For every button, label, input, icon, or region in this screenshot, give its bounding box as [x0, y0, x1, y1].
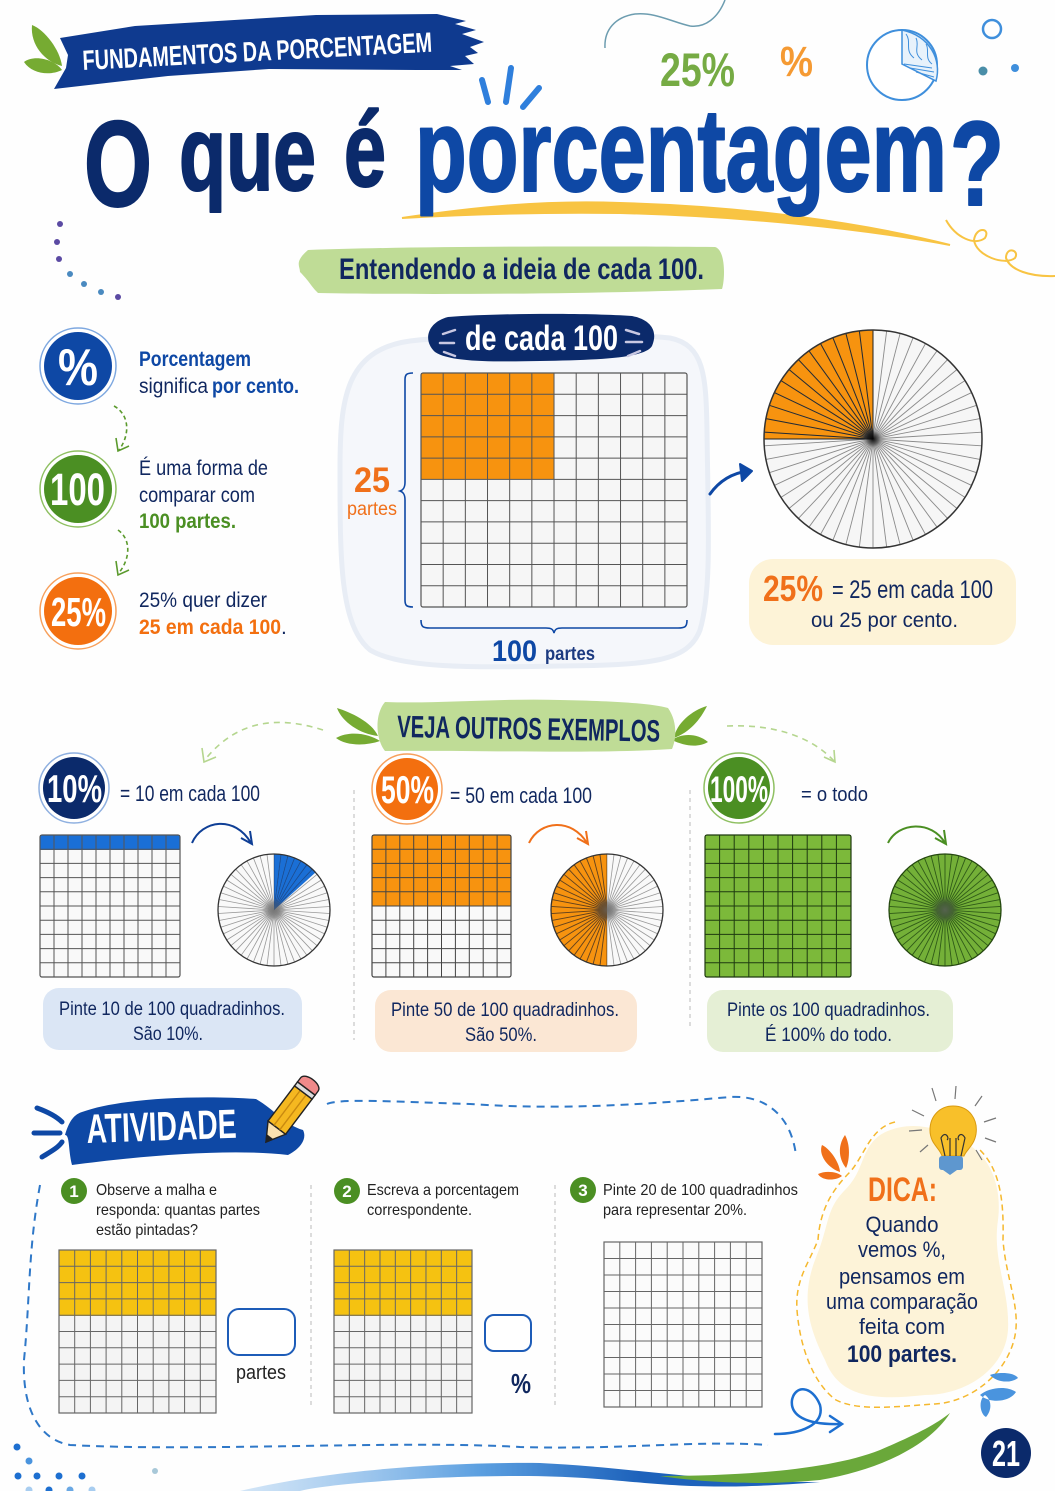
concept list [40, 328, 299, 649]
callout: pinte os 100 [707, 990, 953, 1052]
callout: pinte os 100: Pinte os 100 quadradinhos. [727, 1000, 930, 1021]
badge: 50% [372, 754, 442, 824]
text: comparar [139, 457, 268, 533]
example: 10 percent [39, 753, 330, 1050]
panel: dica: pensamos em [839, 1264, 965, 1289]
icon: blue sparks [980, 1373, 1018, 1417]
top decorations: 25% [660, 43, 735, 96]
title: ? [950, 97, 1004, 231]
badge: 10%: 10% [47, 768, 102, 811]
equation: 10 em cada 100: = 10 em cada 100 [120, 781, 260, 806]
bracket: left [400, 373, 413, 607]
grid: all painted [705, 835, 851, 977]
title underline [402, 202, 950, 245]
label: 100 partes [492, 635, 595, 668]
divider: second [689, 790, 691, 1030]
panel: dica [797, 1122, 1016, 1407]
callout: 25 percent definition [749, 559, 1016, 645]
icon: percent badge [40, 328, 116, 404]
icon: percent badge: % [58, 339, 98, 397]
step one: Observe a malha e [96, 1182, 217, 1199]
text: 25 em cada 100 [139, 589, 287, 639]
panel: dica: 100 partes. [847, 1341, 957, 1368]
step one: responda: quantas partes [96, 1202, 260, 1219]
icon: 25 percent badge: 25% [51, 589, 106, 635]
text: comparar: É uma forma de [139, 457, 268, 480]
arrow: down two [116, 530, 129, 575]
icon: 100 badge: 100 [50, 464, 105, 515]
icon: 100 badge [40, 451, 116, 527]
dotted arc [54, 221, 121, 300]
step three: 3 [578, 1181, 588, 1200]
divider: third [310, 1185, 312, 1405]
step two: correspondente. [367, 1202, 472, 1219]
grid: 100 squares with 25 painted [421, 373, 687, 607]
callout: 25 percent definition: ou 25 por cento. [811, 609, 958, 632]
step two [334, 1178, 531, 1413]
page number [981, 1428, 1031, 1478]
step two: 2 [342, 1182, 352, 1201]
callout: 25 percent definition: 25% [763, 568, 823, 609]
chart: pie 25 percent [764, 330, 982, 548]
arrow: dashed left [202, 722, 323, 762]
callout: pinte 50 [375, 990, 637, 1052]
panel: dica: feita com [859, 1314, 945, 1339]
panel: dica: uma comparação [826, 1289, 978, 1314]
label: percent: % [511, 1368, 531, 1399]
badge: de cada 100: de cada 100 [465, 319, 618, 358]
text: porcentagem [139, 348, 299, 398]
label: 100 partes: 100 [492, 635, 537, 668]
equation: o todo: = o todo [801, 784, 868, 806]
arrow: grid to pie [888, 826, 946, 844]
title: é [344, 91, 386, 209]
arrow: grid to pie [529, 825, 588, 844]
callout: 25 percent definition: = 25 em cada 100 [832, 576, 993, 604]
decoration: dots [14, 1444, 158, 1491]
label: 100 partes: partes [545, 644, 595, 665]
arrow: swirl [775, 1389, 842, 1434]
chart: pie 10 percent [218, 854, 330, 966]
badge: 50%: 50% [381, 769, 434, 812]
callout: pinte 50: São 50%. [465, 1025, 537, 1046]
activity frame [24, 1097, 796, 1448]
yellow squiggle [946, 220, 1055, 276]
heading: veja outros exemplos: VEJA OUTROS EXEMPLOS [397, 709, 660, 749]
divider: first [353, 790, 355, 1040]
top decorations: % [780, 38, 813, 86]
callout: pinte 10 [43, 988, 302, 1050]
example: 100 percent [704, 753, 1001, 1052]
divider: fourth [554, 1185, 556, 1405]
grid: 50 painted [372, 835, 511, 977]
chart: pie 50 percent [551, 854, 663, 966]
icon: pencil [257, 1073, 322, 1149]
label: 25 partes: 25 [354, 461, 390, 500]
answer box: partes [228, 1309, 295, 1355]
step three: para representar 20%. [603, 1202, 747, 1219]
title: que [179, 95, 316, 213]
text: 25 em cada 100: 25% quer dizer [139, 589, 267, 612]
grid: third [604, 1242, 762, 1407]
text: porcentagem: significa [139, 375, 208, 398]
heading: atividade [34, 1073, 322, 1165]
example: 50 percent [372, 754, 663, 1052]
badge: 100% [704, 753, 774, 823]
callout: pinte 50: Pinte 50 de 100 quadradinhos. [391, 1000, 619, 1021]
grid: first [59, 1250, 216, 1413]
text: porcentagem: por cento. [212, 375, 299, 398]
badge: 10% [39, 753, 109, 823]
arrow: dashed right [727, 726, 835, 762]
text: porcentagem: Porcentagem [139, 348, 251, 371]
panel: hundred grid [340, 314, 708, 668]
step one: estão pintadas? [96, 1222, 198, 1239]
page number: 21 [992, 1433, 1020, 1474]
answer box: percent [485, 1315, 531, 1351]
panel: dica: Quando [866, 1212, 938, 1237]
heading: atividade: ATIVIDADE [86, 1101, 237, 1152]
header banner [24, 14, 484, 89]
step three [570, 1177, 798, 1407]
step three: Pinte 20 de 100 quadradinhos [603, 1182, 798, 1199]
decoration: bottom wave [240, 1413, 950, 1491]
subtitle banner [299, 246, 724, 294]
arrow: down one [114, 406, 129, 451]
text: comparar: 100 partes. [139, 510, 236, 533]
top decorations [482, 0, 1019, 107]
bracket: bottom [421, 620, 687, 633]
badge: de cada 100 [428, 314, 654, 361]
arrow: grid to pie [710, 464, 752, 494]
text: 25 em cada 100: 25 em cada 100 [139, 616, 281, 639]
text: comparar: comparar com [139, 484, 255, 507]
grid: 10 painted [40, 835, 180, 977]
header banner: FUNDAMENTOS DA PORCENTAGEM [82, 27, 433, 76]
label: 25 partes [347, 461, 397, 520]
callout: pinte 10: São 10%. [133, 1024, 203, 1045]
panel: dica: DICA: [868, 1171, 937, 1209]
chart: pie 100 percent [889, 854, 1001, 966]
equation: 50 em cada 100: = 50 em cada 100 [450, 783, 592, 808]
label: 25 partes: partes [347, 499, 397, 520]
label: partes: partes [236, 1362, 286, 1384]
callout: pinte 10: Pinte 10 de 100 quadradinhos. [59, 999, 285, 1020]
callout: pinte os 100: É 100% do todo. [765, 1025, 892, 1046]
panel: dica: vemos %, [858, 1237, 946, 1262]
title [84, 85, 1004, 232]
step one [59, 1178, 295, 1413]
arrow: grid to pie [192, 824, 252, 844]
badge: 100%: 100% [710, 769, 768, 810]
icon: light bulb [909, 1086, 996, 1175]
grid: second [334, 1250, 472, 1413]
heading: veja outros exemplos [336, 700, 708, 752]
icon: 25 percent badge [40, 573, 116, 649]
title: O [84, 96, 152, 232]
step two: Escreva a porcentagem [367, 1182, 519, 1199]
step one: 1 [69, 1182, 79, 1201]
text: 25 em cada 100: . [281, 616, 287, 639]
subtitle banner: Entendendo a ideia de cada 100. [339, 253, 704, 286]
icon: orange sparks [818, 1135, 849, 1180]
